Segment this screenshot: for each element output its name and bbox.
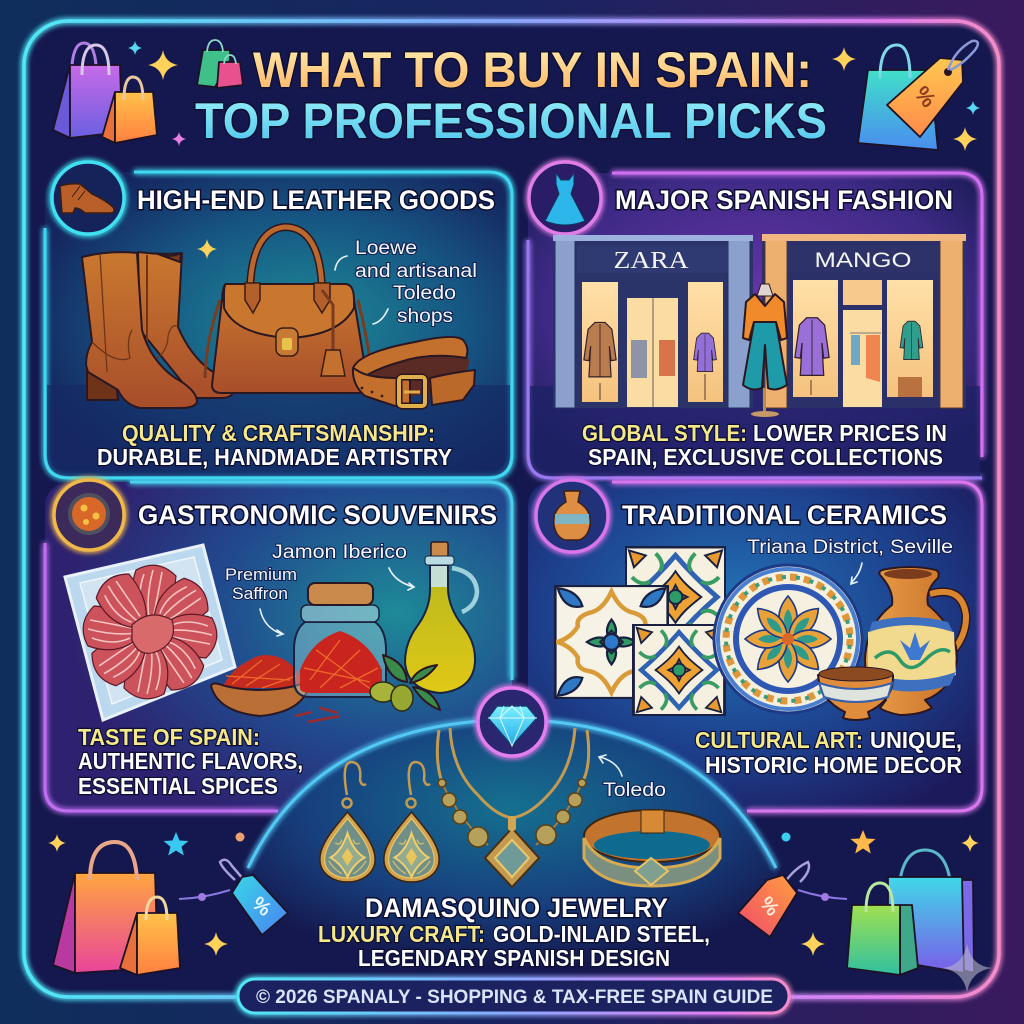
- callout: Loewe and artisanal Toledo shops: [335, 238, 477, 327]
- callouts: Jamon Iberico, Premium Saffron: [225, 542, 414, 636]
- caption: QUALITY & CRAFTSMANSHIP:: [122, 420, 435, 446]
- caption: HISTORIC HOME DECOR: [705, 752, 962, 778]
- mannequin: [743, 284, 787, 417]
- icon: jamon tray: [65, 545, 235, 720]
- heading: DAMASQUINO JEWELRY: [365, 893, 668, 923]
- icon: blue price tag: [179, 860, 288, 935]
- caption: AUTHENTIC FLAVORS,: [78, 748, 303, 774]
- callout: Loewe and artisanal Toledo shops: Toledo: [393, 283, 456, 304]
- icon: tiles: [555, 547, 725, 715]
- title: WHAT TO BUY IN SPAIN:: [253, 42, 812, 98]
- caption: CULTURAL ART:: [695, 727, 863, 753]
- arc area: [240, 717, 782, 975]
- icon: jug: [865, 567, 966, 715]
- caption: UNIQUE,: [870, 727, 962, 753]
- icon: blue price tag: %: [247, 893, 275, 921]
- title: [195, 42, 827, 149]
- panel frame: [612, 173, 982, 457]
- icon: orange price tag: [738, 862, 847, 937]
- footer pill: [238, 979, 789, 1013]
- icon: shoe badge: [52, 162, 124, 234]
- callout: Toledo: [599, 755, 666, 801]
- Zara storefront: [553, 235, 753, 408]
- callout: Loewe and artisanal Toledo shops: and artisanal: [355, 261, 477, 282]
- panel frame: [130, 482, 512, 680]
- callout: Loewe and artisanal Toledo shops: Loewe: [355, 238, 417, 259]
- icon: bowl: [818, 667, 893, 720]
- floor: [530, 386, 980, 476]
- icon: belt: [350, 336, 475, 408]
- floor: [47, 385, 510, 476]
- icon: bracelet: [584, 810, 720, 886]
- heading: MAJOR SPANISH FASHION: [615, 185, 953, 215]
- watermark sparkle: [942, 944, 992, 992]
- caption: [78, 724, 303, 799]
- icon: amphora badge: [536, 480, 608, 552]
- icon: olive oil bottle: [405, 542, 477, 693]
- callouts: Jamon Iberico, Premium Saffron: Saffron: [232, 584, 288, 603]
- panel: gastronomic souvenirs: [45, 480, 512, 811]
- panel: traditional ceramics: [528, 480, 982, 811]
- sign: MANGO: MANGO: [814, 249, 912, 272]
- heading: GASTRONOMIC SOUVENIRS: [138, 500, 497, 530]
- stars and dots: [164, 830, 876, 856]
- icon: jewel necklace: [437, 728, 589, 887]
- icon: shopping bags top left: [53, 43, 157, 143]
- icon: boots: [82, 252, 233, 408]
- heading: TRADITIONAL CERAMICS: [622, 500, 947, 530]
- callout: Loewe and artisanal Toledo shops: shops: [397, 306, 453, 327]
- icon: olives: [370, 655, 440, 711]
- caption: [582, 420, 947, 470]
- callout: Toledo: Toledo: [603, 780, 666, 801]
- caption: GOLD-INLAID STEEL,: [493, 921, 710, 947]
- panel: high-end leather goods: [45, 162, 512, 478]
- panel: Damasquino jewelry: [240, 688, 782, 975]
- icon: diamond badge: [478, 688, 546, 756]
- caption: LOWER PRICES IN: [753, 420, 947, 446]
- icon: shopping bag and tag top right: %: [910, 81, 941, 112]
- caption: LUXURY CRAFT:: [318, 921, 485, 947]
- icon: dress badge: [529, 162, 601, 234]
- icon: mini bags by title: [197, 40, 243, 88]
- Mango storefront: [762, 234, 966, 408]
- caption: ESSENTIAL SPICES: [78, 773, 278, 799]
- panel frame: [45, 172, 512, 478]
- callouts: Jamon Iberico, Premium Saffron: Jamon Iberico: [272, 542, 407, 563]
- caption: LEGENDARY SPANISH DESIGN: [358, 945, 670, 971]
- callouts: Jamon Iberico, Premium Saffron: Premium: [225, 565, 297, 584]
- icon: saffron bowl: [211, 655, 340, 722]
- coat: [584, 322, 616, 377]
- callout: Triana District, Seville: Triana District, Seville: [747, 537, 953, 558]
- caption: [318, 921, 710, 971]
- callout: Triana District, Seville: [747, 537, 953, 584]
- icon: paella badge: [54, 480, 124, 550]
- icon: saffron jar: [294, 583, 386, 697]
- icon: handbag: [205, 227, 372, 393]
- caption: TASTE OF SPAIN:: [78, 724, 260, 750]
- icon: orange price tag: %: [755, 893, 784, 921]
- caption: DURABLE, HANDMADE ARTISTRY: [97, 444, 452, 470]
- panel frame: [612, 482, 982, 811]
- heading: HIGH-END LEATHER GOODS: [137, 185, 495, 215]
- caption: SPAIN, EXCLUSIVE COLLECTIONS: [588, 444, 943, 470]
- icon: decorated plate: [714, 565, 862, 713]
- footer pill: © 2026 SPANALY - SHOPPING & TAX-FREE SPAIN GUIDE: [256, 987, 773, 1008]
- icon: shopping bag and tag top right: [858, 41, 978, 150]
- caption: [695, 727, 962, 778]
- icon: shopping bags bottom right: [847, 850, 974, 975]
- title: TOP PROFESSIONAL PICKS: [195, 93, 827, 149]
- neon arc: [248, 721, 776, 868]
- panel: major Spanish fashion: [528, 162, 982, 478]
- icon: shopping bags bottom left: [53, 842, 180, 975]
- caption: [97, 420, 452, 470]
- sign: ZARA: ZARA: [614, 248, 689, 274]
- caption: GLOBAL STYLE:: [582, 420, 747, 446]
- icon: earrings: [320, 762, 439, 882]
- sparkles: [197, 239, 217, 259]
